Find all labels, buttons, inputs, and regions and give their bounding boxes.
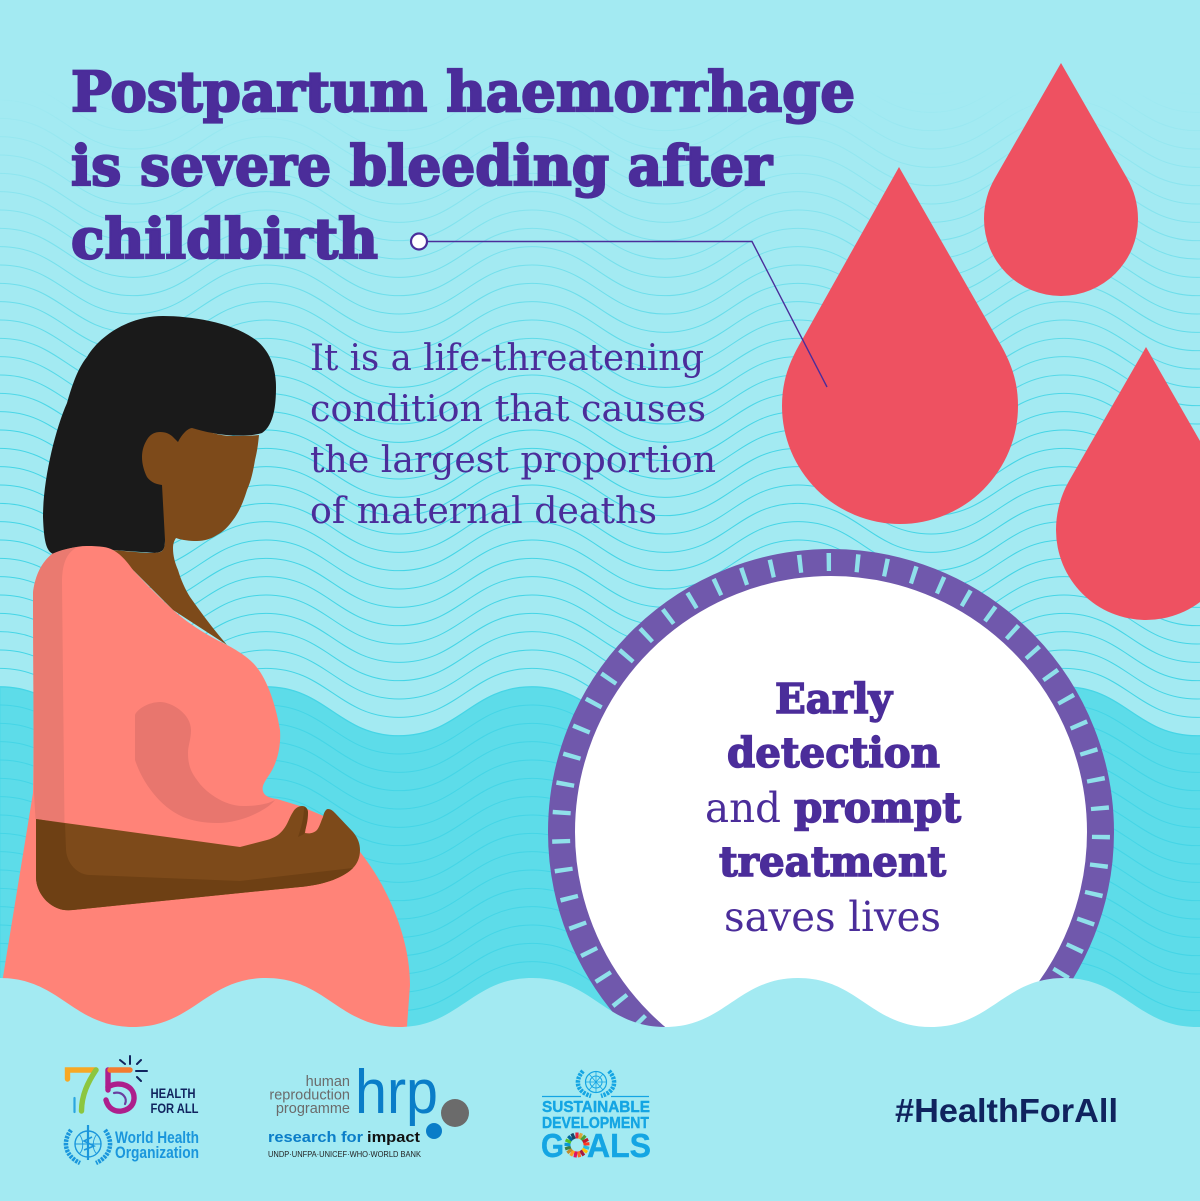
drop: large bbox=[782, 167, 1018, 524]
logo: world health organization bbox=[66, 1125, 199, 1163]
description text bbox=[310, 338, 716, 532]
name bbox=[115, 1129, 199, 1162]
name: World Health bbox=[115, 1129, 199, 1147]
rule bbox=[542, 1096, 649, 1098]
programme name: reproduction bbox=[269, 1088, 350, 1104]
thumb shadow bbox=[298, 807, 308, 837]
arm shadow bbox=[36, 819, 353, 910]
emblem bbox=[66, 1125, 110, 1163]
pale foreground wave bbox=[0, 978, 1200, 1201]
badge text: treatment bbox=[719, 838, 946, 886]
title: childbirth bbox=[71, 206, 378, 271]
logo: hrp bbox=[268, 1058, 469, 1159]
health for all text bbox=[150, 1086, 198, 1116]
SDG name bbox=[541, 1099, 651, 1164]
title bbox=[71, 59, 855, 271]
hair bbox=[43, 316, 276, 555]
SDG name: DEVELOPMENT bbox=[542, 1115, 649, 1132]
tagline: impact bbox=[367, 1129, 420, 1146]
arm and hand bbox=[36, 806, 360, 910]
badge text: detection bbox=[727, 729, 940, 777]
digit 7 bbox=[68, 1070, 96, 1112]
hrp letters: hrp bbox=[355, 1058, 438, 1127]
sun rays bbox=[120, 1056, 147, 1081]
logo: sustainable development goals bbox=[541, 1071, 651, 1164]
SDG name: SUSTAINABLE bbox=[542, 1099, 650, 1116]
face and neck bbox=[113, 428, 259, 645]
drop: right edge bbox=[1056, 347, 1200, 620]
badge text: and bbox=[705, 784, 781, 832]
dress bbox=[0, 546, 410, 1040]
circular badge bbox=[558, 559, 1104, 1105]
back shading bbox=[33, 547, 78, 825]
darker water band bbox=[0, 687, 1200, 1060]
SDG name: G bbox=[541, 1127, 564, 1164]
health for all text: HEALTH bbox=[150, 1086, 196, 1101]
connector line from title to drop bbox=[411, 234, 827, 387]
badge text: prompt bbox=[794, 784, 961, 832]
name: Organization bbox=[115, 1144, 199, 1162]
partners: UNDP·UNFPA·UNICEF·WHO·WORLD BANK bbox=[268, 1149, 421, 1159]
UN emblem bbox=[578, 1071, 614, 1096]
SDG colour wheel bbox=[565, 1132, 589, 1157]
badge text: Early bbox=[775, 675, 893, 723]
programme name: human bbox=[306, 1074, 350, 1090]
description text: It is a life-threatening bbox=[310, 338, 704, 379]
tagline bbox=[268, 1129, 420, 1146]
hashtag: #HealthForAll bbox=[895, 1092, 1118, 1129]
chest shading bbox=[135, 702, 275, 823]
tagline: research for bbox=[268, 1129, 363, 1146]
title: Postpartum haemorrhage bbox=[71, 59, 855, 124]
digit 5 bbox=[106, 1070, 134, 1111]
description text: the largest proportion bbox=[310, 440, 716, 481]
logo: 75 health for all bbox=[68, 1056, 198, 1116]
health for all text: FOR ALL bbox=[150, 1101, 198, 1116]
pregnant woman bbox=[0, 316, 410, 1040]
blood drops bbox=[782, 63, 1200, 620]
programme name bbox=[269, 1074, 350, 1117]
description text: condition that causes bbox=[310, 389, 706, 430]
drop: top right bbox=[984, 63, 1138, 296]
title: is severe bleeding after bbox=[71, 133, 773, 198]
wavy line pattern bbox=[0, 124, 1200, 1011]
badge text bbox=[705, 675, 961, 941]
badge text: saves lives bbox=[724, 893, 941, 941]
description text: of maternal deaths bbox=[310, 491, 657, 532]
programme name: programme bbox=[276, 1101, 350, 1117]
dots bbox=[426, 1099, 469, 1139]
SDG name: ALS bbox=[587, 1127, 651, 1164]
